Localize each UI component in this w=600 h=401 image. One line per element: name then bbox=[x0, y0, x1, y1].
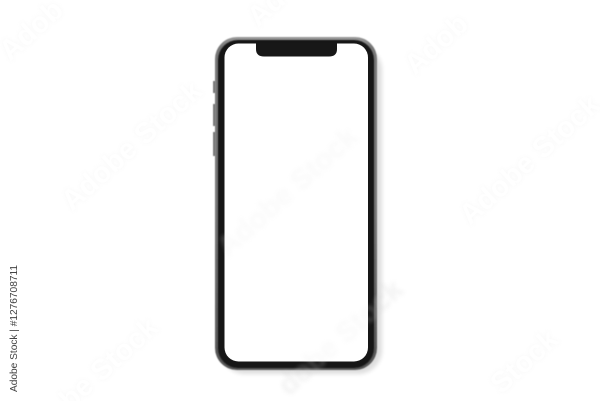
watermarks: Adobe Stock bbox=[211, 120, 365, 263]
screen watermarks bbox=[211, 120, 410, 401]
notch bbox=[256, 43, 337, 56]
watermarks: Adobe Stock bbox=[55, 74, 209, 217]
watermarks: Adob bbox=[398, 8, 475, 81]
watermarks: Adob bbox=[398, 8, 475, 81]
screen bbox=[224, 44, 368, 362]
screen watermarks: Adobe Stock bbox=[211, 120, 365, 263]
watermarks: dobe Stock bbox=[272, 273, 410, 401]
watermarks: Adobe Stock bbox=[55, 74, 209, 217]
side buttons bbox=[213, 81, 216, 156]
watermarks: Stock bbox=[485, 323, 565, 400]
screen watermarks: dobe Stock bbox=[272, 273, 410, 401]
inner black bezel bbox=[218, 40, 374, 368]
phone drop shadow bbox=[221, 46, 382, 374]
phone frame bbox=[215, 37, 377, 370]
phone bbox=[213, 37, 377, 370]
watermarks: Stock bbox=[485, 323, 565, 400]
stock credit: Adobe Stock | #1276708711 bbox=[8, 265, 20, 392]
